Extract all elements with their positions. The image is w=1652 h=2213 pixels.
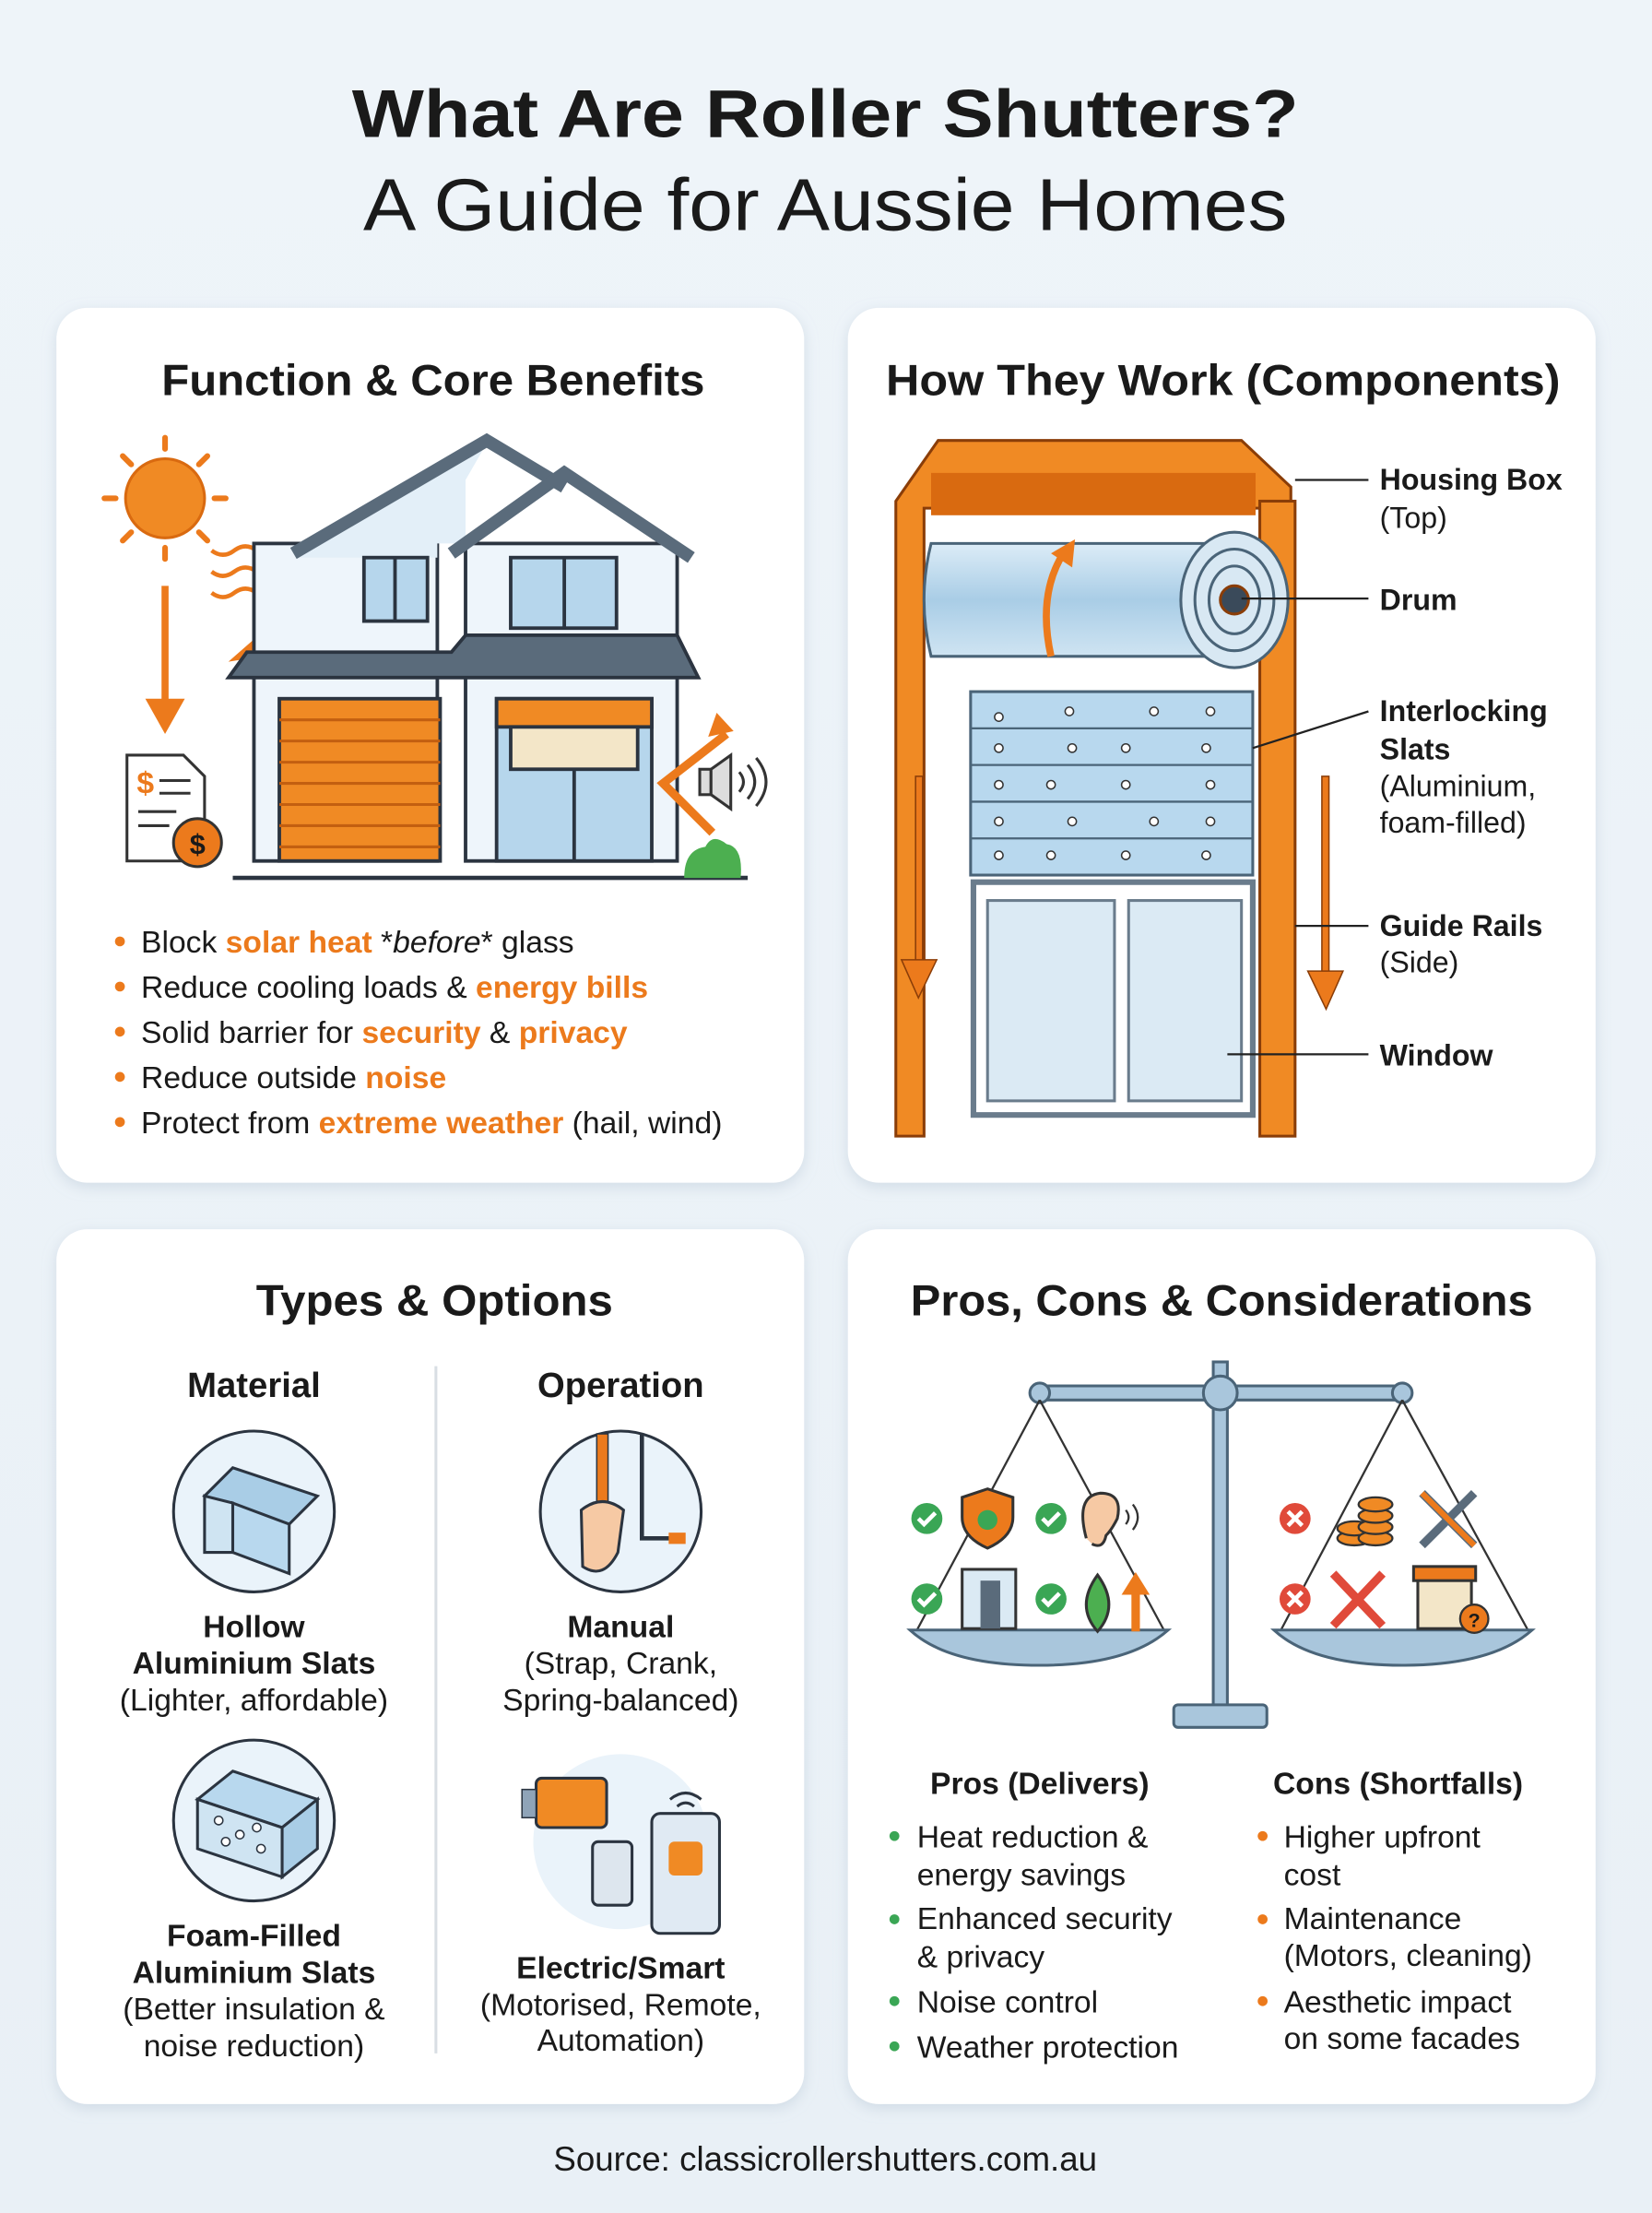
icon: foam slat [173, 1740, 335, 1901]
text: foam [123, 1920, 385, 2064]
component labels: Guide Rails [1380, 909, 1542, 942]
text: electric: (Motorised, Remote, [480, 1989, 761, 2023]
heading: pros cons: Pros, Cons & Considerations [911, 1276, 1533, 1325]
illustration: house [229, 441, 748, 878]
list: cons: Cons (Shortfalls) [1273, 1767, 1523, 1801]
text: manual: (Strap, Crank, [525, 1647, 717, 1681]
component labels [1380, 463, 1563, 1072]
heading: function: Function & Core Benefits [161, 357, 704, 406]
text: electric: Automation) [537, 2024, 704, 2058]
text: hollow: Aluminium Slats [133, 1647, 375, 1681]
list: cons: cost [1284, 1859, 1341, 1893]
list: pros: energy savings [917, 1859, 1126, 1893]
title [352, 77, 1299, 246]
text: hollow [120, 1610, 388, 1718]
component labels: Slats [1380, 733, 1450, 766]
list: pros: Pros (Delivers) [930, 1767, 1150, 1801]
panel: types & options: Material [187, 1366, 321, 1405]
panel: types & options [56, 1229, 804, 2104]
arrows: down [902, 776, 1343, 1009]
icon: electric smart [522, 1754, 719, 1934]
benefits list: Reduce cooling loads & energy bills [141, 971, 648, 1005]
component labels: Window [1380, 1039, 1493, 1072]
component labels: (Top) [1380, 502, 1447, 535]
benefits list: Reduce outside noise [141, 1061, 446, 1095]
text: foam: noise reduction) [144, 2030, 364, 2064]
text: manual: Manual [567, 1610, 674, 1644]
heading: types: Types & Options [256, 1276, 613, 1325]
list: pros: & privacy [917, 1940, 1044, 1974]
text: manual [502, 1610, 739, 1718]
component labels: Housing Box [1380, 463, 1563, 496]
icon: heat waves deflected [212, 546, 332, 657]
icon: manual strap [540, 1431, 702, 1592]
text: foam: Aluminium Slats [133, 1956, 375, 1990]
panel: function & core benefits [56, 308, 804, 1183]
title: What Are Roller Shutters? [352, 77, 1299, 152]
benefits list [115, 926, 722, 1141]
panel: how they work [848, 308, 1596, 1183]
panel: types & options: Operation [537, 1366, 704, 1405]
arrow: sun to bill [146, 586, 184, 734]
text: manual: Spring-balanced) [502, 1684, 739, 1718]
icon: energy bill: $ [190, 829, 206, 860]
list: cons: Aesthetic impact [1284, 1985, 1512, 2019]
list: pros [890, 1767, 1178, 2065]
icon: hollow slat [173, 1431, 335, 1592]
component labels: (Aluminium, [1380, 769, 1536, 802]
list: cons: Maintenance [1284, 1902, 1461, 1936]
illustration: balance scale [910, 1362, 1532, 1727]
callout lines [1227, 480, 1368, 1054]
list: cons: on some facades [1284, 2022, 1520, 2056]
text: electric [480, 1952, 761, 2058]
icons: pros [912, 1489, 1150, 1631]
benefits list: Block solar heat *before* glass [141, 926, 574, 960]
heading: components: How They Work (Components) [886, 357, 1561, 406]
diagram: roller shutter [896, 441, 1295, 1136]
text: electric: Electric/Smart [516, 1952, 726, 1986]
list: pros: Noise control [917, 1985, 1098, 2019]
component labels: foam-filled) [1380, 806, 1527, 839]
list: cons: (Motors, cleaning) [1284, 1939, 1532, 1973]
benefits list: Protect from extreme weather (hail, wind) [141, 1106, 722, 1141]
source: Source: classicrollershutters.com.au [553, 2140, 1097, 2178]
list: cons [1257, 1767, 1532, 2056]
list: cons: Higher upfront [1284, 1820, 1481, 1854]
title: A Guide for Aussie Homes [363, 164, 1287, 246]
component labels: Drum [1380, 583, 1457, 616]
benefits list: Solid barrier for security & privacy [141, 1016, 628, 1050]
component labels: Interlocking [1380, 694, 1548, 728]
icon: energy bill [127, 755, 221, 867]
icons: cons [1280, 1493, 1488, 1633]
list: pros: Enhanced security [917, 1902, 1173, 1936]
list: pros: Heat reduction & [917, 1820, 1148, 1854]
text: foam: (Better insulation & [123, 1993, 385, 2027]
component labels: (Side) [1380, 946, 1458, 979]
list: pros: Weather protection [917, 2030, 1178, 2065]
icon: energy bill: $ [136, 766, 154, 800]
text: hollow: Hollow [203, 1610, 305, 1644]
icon: sun [104, 438, 226, 559]
panel: pros cons [848, 1229, 1596, 2104]
icons: cons: ? [1469, 1610, 1481, 1632]
text: foam: Foam-Filled [167, 1920, 341, 1954]
text: hollow: (Lighter, affordable) [120, 1684, 388, 1718]
icon: bush [684, 839, 741, 878]
icon: noise speaker with deflect arrow [663, 713, 766, 833]
